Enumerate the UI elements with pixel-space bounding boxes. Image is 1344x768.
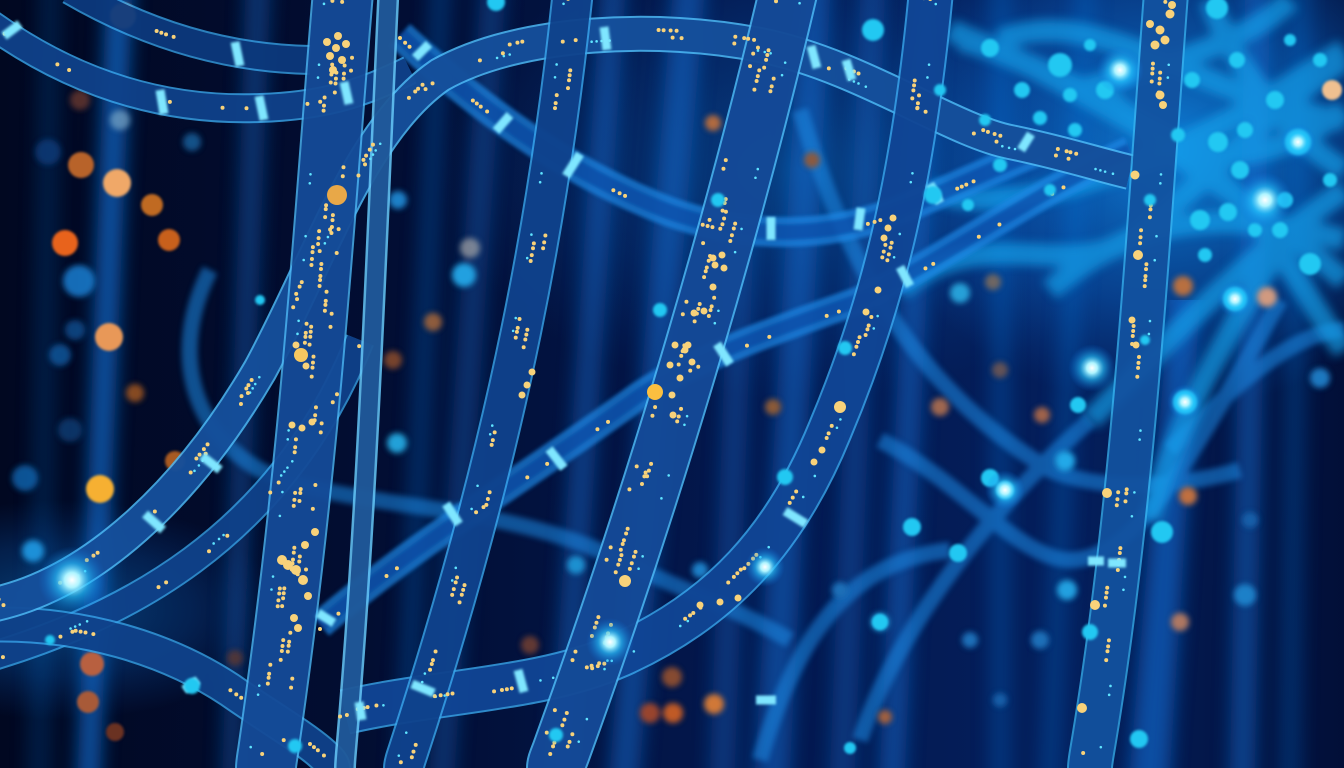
tube: vertical fibres — [266, 0, 1167, 768]
bright star flares — [38, 46, 1316, 666]
tube: soft curved fibres behind — [320, 35, 1130, 625]
bokeh: orange lights at left — [52, 3, 185, 741]
glowing cyan network at top right — [900, 0, 1344, 520]
gold clusters — [277, 1, 1176, 713]
blurred background curved fibres — [190, 110, 1344, 760]
bright bands on fibres — [4, 24, 1126, 720]
